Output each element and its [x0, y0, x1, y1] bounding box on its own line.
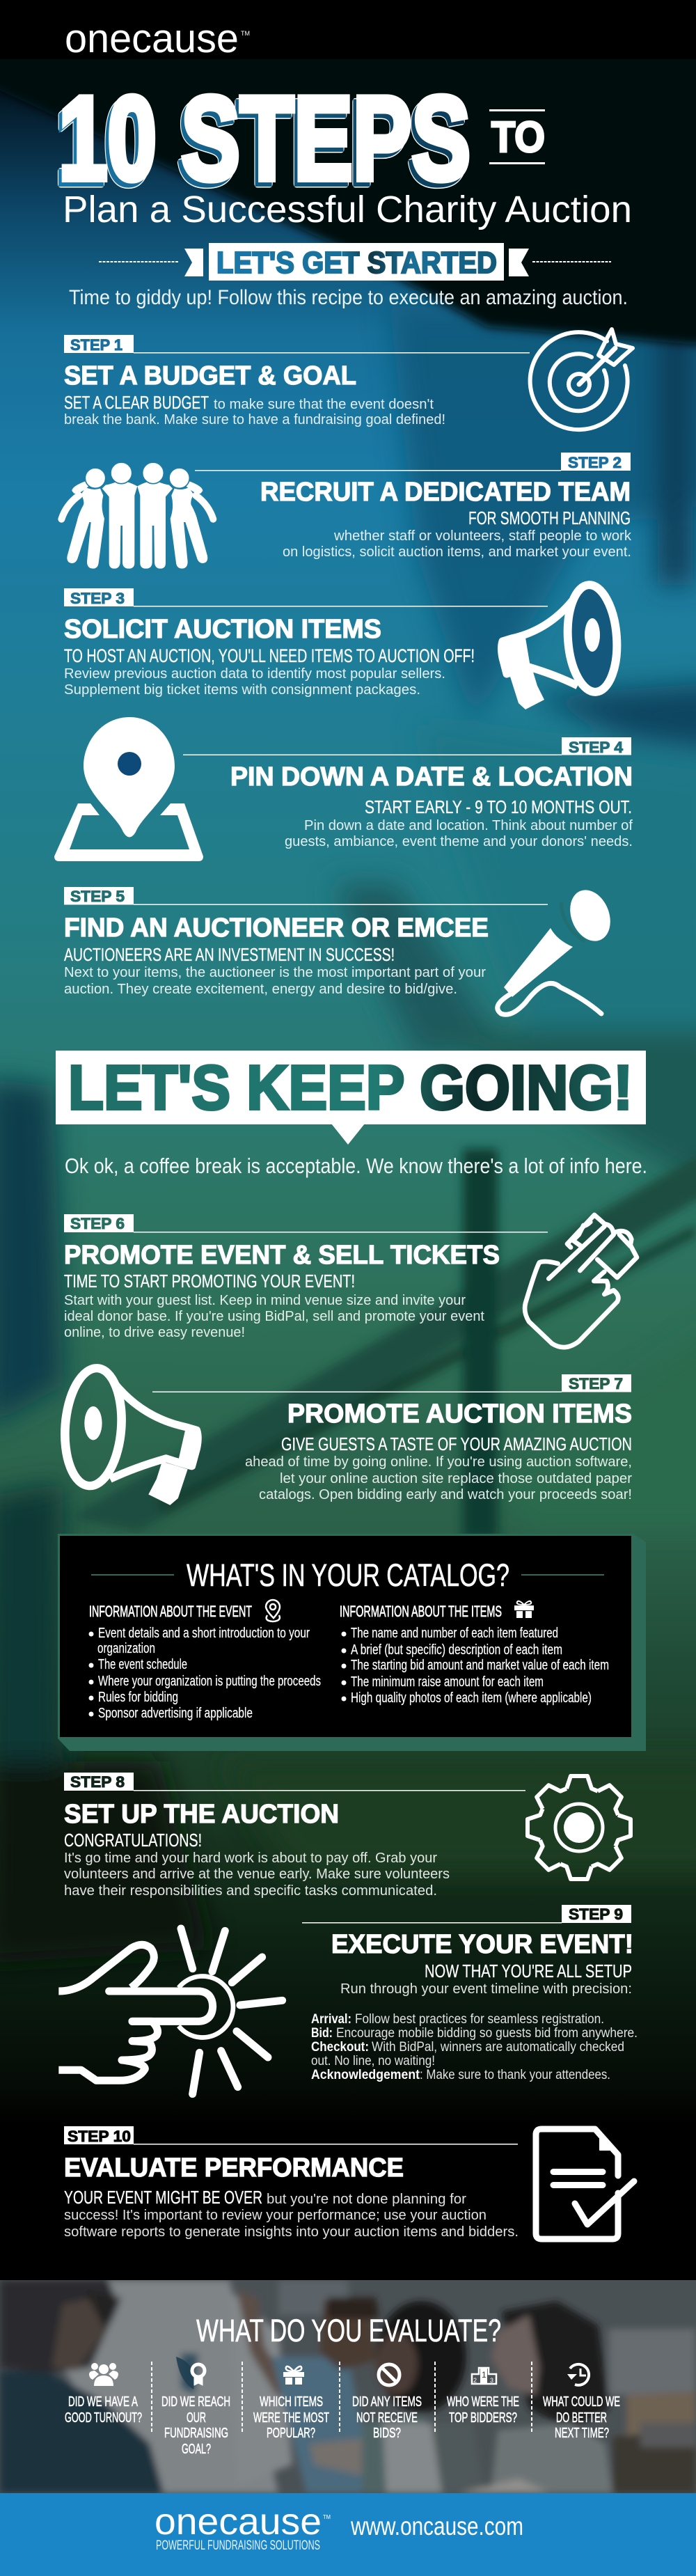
team photo backdrop: [0, 2280, 696, 2493]
step 6 text: Start with your guest list. Keep in mind venue size and invite your: [64, 1293, 466, 1308]
step 7 text: ahead of time by going online. If you're using auction software,: [245, 1454, 632, 1470]
footer logo: onecause: [155, 2501, 322, 2543]
step 4 badge: [183, 737, 631, 756]
step 8 text: It's go time and your hard work is about to pay off. Grab your: [64, 1851, 437, 1866]
column: about the event: INFORMATION ABOUT THE EVENT: [89, 1603, 252, 1620]
step 1 text: break the bank. Make sure to have a fundraising goal defined!: [64, 412, 445, 427]
step 6 badge: STEP 6: [70, 1215, 125, 1232]
icon: target: [530, 329, 633, 430]
catalog title: WHAT'S IN YOUR CATALOG?: [187, 1557, 509, 1593]
item: no bids: NOT RECEIVE: [356, 2410, 418, 2426]
step 10 text: YOUR EVENT MIGHT BE OVER: [64, 2187, 262, 2208]
step 1 text: to make sure that the event doesn't: [214, 397, 434, 412]
step 7 text: let your online auction site replace those outdated paper: [280, 1471, 632, 1486]
step 3 text: Review previous auction data to identify most popular sellers.: [64, 666, 445, 682]
subtitle: Plan a Successful Charity Auction: [63, 189, 632, 230]
panel: step 4: [54, 717, 633, 861]
step 7 heading: PROMOTE AUCTION ITEMS: [287, 1399, 632, 1429]
footer logo: POWERFUL FUNDRAISING SOLUTIONS: [156, 2538, 320, 2553]
column: about the event: organization: [97, 1641, 155, 1656]
footer: [0, 2493, 696, 2576]
item: good turnout: [65, 2363, 142, 2426]
column: about the event: The event schedule: [98, 1657, 187, 1672]
step 2 badge: [195, 453, 631, 471]
step 7 badge: STEP 7: [569, 1375, 623, 1392]
step 9 badge: [302, 1905, 631, 1923]
item: do better next time: NEXT TIME?: [555, 2425, 609, 2441]
ribbon: let's get started: LET'S GET STARTED: [216, 246, 497, 280]
item: no bids: DID ANY ITEMS: [352, 2394, 422, 2410]
timeline list: Bid:: [311, 2026, 333, 2041]
step 8 text: CONGRATULATIONS!: [64, 1830, 202, 1851]
banner: let's keep going: [56, 1051, 646, 1145]
icon: map pin: [54, 717, 203, 861]
timeline list: : Make sure to thank your attendees.: [420, 2068, 610, 2082]
step 1 heading: SET A BUDGET & GOAL: [64, 361, 356, 391]
item: do better next time: [543, 2364, 620, 2441]
step 10 badge: STEP 10: [68, 2128, 131, 2145]
step 4 heading: PIN DOWN A DATE & LOCATION: [230, 762, 633, 792]
item: do better next time: WHAT COULD WE: [543, 2394, 620, 2410]
column: about the event: Sponsor advertising if applicable: [98, 1706, 253, 1721]
step 1 badge: STEP 1: [70, 336, 122, 354]
evaluate title: WHAT DO YOU EVALUATE?: [196, 2313, 501, 2348]
step 5 text: auction. They create excitement, energy and desire to bid/give.: [64, 982, 457, 997]
column: about the items: The minimum raise amount for each item: [351, 1674, 544, 1690]
step 3 badge: [64, 588, 548, 607]
step 2 text: whether staff or volunteers, staff people to work: [333, 528, 632, 544]
item: fundraising goal: GOAL?: [182, 2441, 211, 2457]
banner: let's keep going: LET'S KEEP GOING!: [68, 1053, 633, 1123]
timeline list: Acknowledgement: [311, 2068, 420, 2082]
step 4 text: guests, ambiance, event theme and your donors' needs.: [285, 834, 633, 849]
ribbon: let's get started: [99, 243, 611, 281]
item: fundraising goal: DID WE REACH: [161, 2394, 230, 2410]
timeline list: out. No line, no waiting!: [311, 2054, 435, 2068]
step 1 text: SET A CLEAR BUDGET: [64, 392, 209, 413]
icon: megaphone outline: [61, 1367, 198, 1505]
step 6 text: TIME TO START PROMOTING YOUR EVENT!: [64, 1271, 355, 1291]
header logo: onecause: [65, 16, 239, 61]
footer logo: TM: [323, 2514, 331, 2520]
column: about the event: [89, 1600, 321, 1721]
step 3 text: [64, 645, 475, 698]
step 9 text: Run through your event timeline with precision:: [340, 1981, 632, 1997]
step 5 badge: STEP 5: [70, 888, 125, 905]
column: about the items: A brief (but specific) description of each item: [351, 1642, 562, 1658]
step 8 text: [64, 1830, 450, 1899]
step 10 text: success! It's important to review your performance; use your auction: [64, 2208, 487, 2223]
step 4 badge: STEP 4: [569, 739, 624, 756]
step 3 text: TO HOST AN AUCTION, YOU'LL NEED ITEMS TO AUCTION OFF!: [64, 645, 475, 666]
step 9 text: [340, 1961, 632, 1997]
header logo: TM: [241, 30, 250, 37]
step 3 heading: SOLICIT AUCTION ITEMS: [64, 615, 381, 644]
item: top bidders: [447, 2367, 519, 2426]
item: popular items: POPULAR?: [267, 2425, 315, 2441]
timeline list: With BidPal, winners are automatically checked: [372, 2040, 624, 2055]
step 10 text: software reports to generate insights into your auction items and bidders.: [64, 2224, 519, 2240]
step 7 badge: [152, 1374, 631, 1392]
icon: microphone: [498, 884, 617, 1014]
panel: step 7: [61, 1367, 632, 1505]
item: no bids: BIDS?: [373, 2425, 401, 2441]
step 6 text: [64, 1271, 484, 1340]
step 8 text: volunteers and arrive at the venue early. Make sure volunteers: [64, 1867, 450, 1882]
item: do better next time: DO BETTER: [556, 2410, 607, 2426]
column: about the event: Rules for bidding: [98, 1690, 178, 1705]
step 5 text: AUCTIONEERS ARE AN INVESTMENT IN SUCCESS!: [64, 944, 395, 965]
step 1 text: [64, 392, 445, 427]
column: about the items: The starting bid amount and market value of each item: [351, 1658, 609, 1673]
step 6 text: ideal donor base. If you're using BidPal, sell and promote your event: [64, 1309, 484, 1324]
icon: hand with tickets: [525, 1215, 637, 1347]
title: 10 steps: 10 STEPS: [55, 77, 467, 210]
step 2 text: on logistics, solicit auction items, and market your event.: [283, 544, 631, 560]
icon: megaphone: [501, 583, 620, 709]
step 3 text: Supplement big ticket items with consignment packages.: [64, 682, 420, 698]
item: popular items: [253, 2366, 329, 2441]
column: about the items: [340, 1601, 609, 1706]
item: fundraising goal: FUNDRAISING: [164, 2425, 228, 2441]
step 7 text: [245, 1434, 632, 1502]
icon: team of people: [61, 462, 213, 569]
column: about the items: INFORMATION ABOUT THE ITEMS: [340, 1603, 502, 1620]
item: top bidders: 1: [482, 2370, 487, 2380]
step 4 text: START EARLY - 9 TO 10 MONTHS OUT.: [365, 796, 632, 817]
timeline list: Checkout:: [311, 2040, 369, 2055]
step 8 badge: [64, 1773, 525, 1791]
panel: what's in your catalog: [58, 1534, 646, 1751]
step 10 badge: [64, 2126, 518, 2145]
step 2 text: FOR SMOOTH PLANNING: [468, 508, 631, 528]
timeline list: Arrival:: [311, 2012, 351, 2027]
step 6 badge: [64, 1214, 548, 1232]
item: fundraising goal: [161, 2364, 230, 2457]
step 9 badge: STEP 9: [569, 1906, 623, 1923]
step 9 heading: EXECUTE YOUR EVENT!: [331, 1930, 633, 1959]
timeline list: Encourage mobile bidding so guests bid from anywhere.: [336, 2026, 638, 2041]
step 2 badge: STEP 2: [568, 454, 622, 471]
timeline list: Follow best practices for seamless registration.: [355, 2012, 604, 2027]
item: top bidders: 2: [473, 2377, 477, 2384]
step 7 text: catalogs. Open bidding early and watch your proceeds soar!: [259, 1487, 632, 1502]
intro text: Time to giddy up! Follow this recipe to execute an amazing auction.: [69, 286, 628, 309]
step 10 text: but you're not done planning for: [267, 2192, 466, 2207]
step 10 text: [64, 2187, 519, 2240]
panel: step 8: [64, 1773, 631, 1899]
step 3 badge: STEP 3: [70, 590, 125, 607]
panel: step 3: [64, 583, 620, 709]
step 9 text: NOW THAT YOU'RE ALL SETUP: [425, 1961, 632, 1981]
item: top bidders: WHO WERE THE: [447, 2394, 519, 2410]
step 5 text: Next to your items, the auctioneer is the most important part of your: [64, 965, 486, 980]
step 4 text: [285, 796, 633, 849]
icon: hand pressing button: [58, 1929, 283, 2094]
item: popular items: WERE THE MOST: [253, 2410, 329, 2426]
timeline list: [311, 2012, 638, 2082]
step 4 text: Pin down a date and location. Think about number of: [304, 818, 633, 833]
step 5 heading: FIND AN AUCTIONEER OR EMCEE: [64, 913, 489, 943]
column: about the event: Event details and a short introduction to your: [98, 1626, 310, 1641]
icon: checklist document: [536, 2129, 634, 2239]
item: popular items: WHICH ITEMS: [260, 2394, 323, 2410]
item: no bids: [352, 2364, 422, 2441]
step 6 text: online, to drive easy revenue!: [64, 1325, 245, 1340]
step 8 text: have their responsibilities and specific tasks communicated.: [64, 1883, 437, 1899]
step 1 badge: [64, 335, 530, 354]
item: fundraising goal: OUR: [187, 2410, 206, 2426]
step 10 heading: EVALUATE PERFORMANCE: [64, 2153, 404, 2183]
column: about the event: Where your organization is putting the proceeds: [98, 1674, 321, 1689]
panel: step 6: [64, 1214, 637, 1347]
panel: step 10: [64, 2126, 634, 2240]
title: 10 steps: 10 STEPS: [55, 77, 467, 210]
panel: what do you evaluate: [0, 2280, 696, 2493]
step 2 heading: RECRUIT A DEDICATED TEAM: [260, 478, 631, 507]
step 5 text: [64, 944, 486, 997]
title: to: TO: [491, 113, 545, 162]
title: 10 steps: 10 STEPS: [58, 72, 470, 205]
step 5 badge: [64, 887, 548, 905]
step 6 heading: PROMOTE EVENT & SELL TICKETS: [64, 1241, 500, 1270]
step 8 badge: STEP 8: [70, 1773, 125, 1791]
dashed separators: [152, 2362, 532, 2433]
item: top bidders: TOP BIDDERS?: [449, 2410, 517, 2426]
panel: step 5: [64, 884, 617, 1014]
step 2 text: [283, 508, 632, 560]
item: top bidders: 3: [490, 2377, 493, 2384]
column: about the items: High quality photos of each item (where applicable): [351, 1690, 592, 1706]
column: about the items: The name and number of each item featured: [351, 1626, 558, 1641]
panel: step 9: [58, 1905, 638, 2094]
panel: step 2: [61, 453, 632, 569]
icon: gear: [528, 1776, 631, 1879]
panel: step 1: [64, 329, 633, 430]
item: good turnout: DID WE HAVE A: [68, 2394, 138, 2410]
website: www.oncause.com: [350, 2512, 523, 2540]
item: good turnout: GOOD TURNOUT?: [65, 2410, 142, 2426]
step 8 heading: SET UP THE AUCTION: [64, 1800, 339, 1829]
